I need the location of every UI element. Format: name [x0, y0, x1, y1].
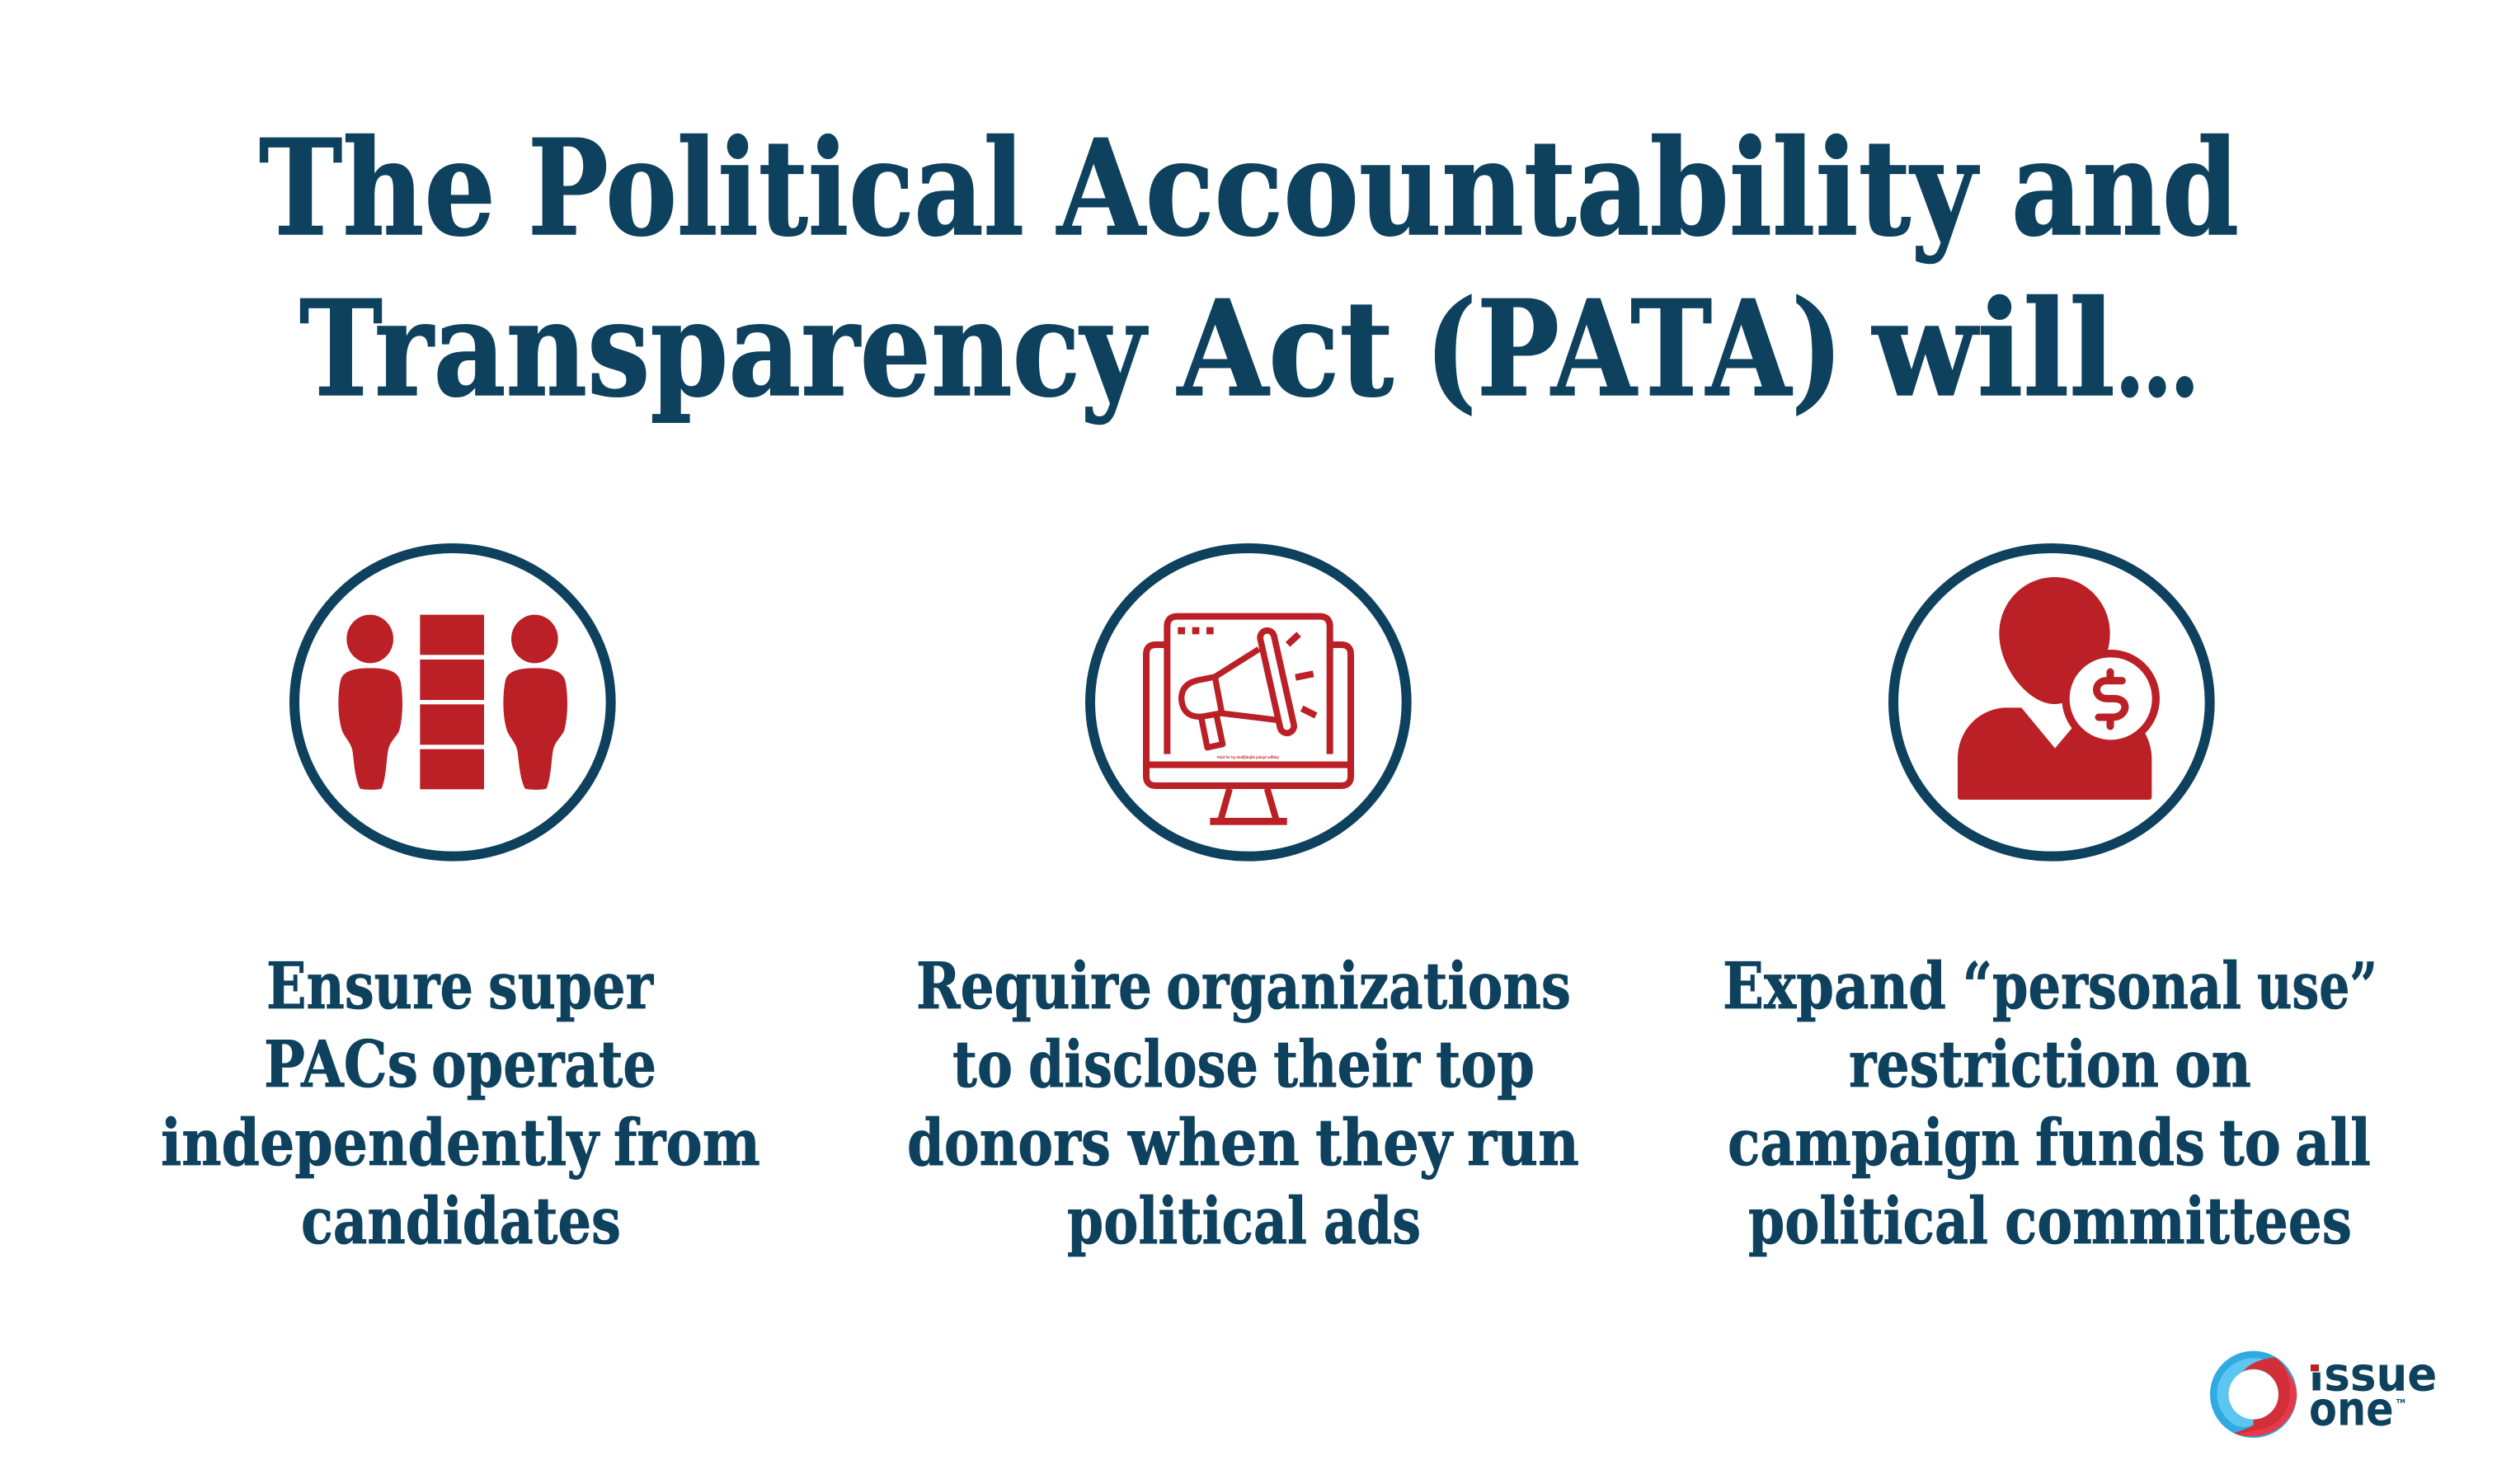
text block: donor disclosure: Require — [916, 949, 1152, 1024]
text block: super PACs: Ensure — [266, 949, 473, 1024]
panel: donor disclosure — [907, 548, 1579, 1259]
text block: personal use: political — [1748, 1184, 1988, 1259]
text block: personal use: “personal — [1963, 949, 2241, 1024]
icon: monitor with megaphone — [1090, 548, 1407, 857]
icon: logo ring — [2210, 1351, 2297, 1438]
panel: super PACs independence — [161, 548, 760, 1259]
title: ... — [2116, 303, 2198, 419]
text block: donor disclosure: when — [1127, 1106, 1300, 1181]
text block: donor disclosure: disclose — [1028, 1027, 1258, 1102]
title: Act — [1176, 271, 1394, 426]
title: (PATA) — [1425, 271, 1843, 426]
text block: personal use: on — [2175, 1027, 2251, 1102]
text block: personal use: committees — [2005, 1184, 2352, 1259]
title: Political — [528, 110, 1024, 265]
text block: personal use — [1723, 949, 2377, 1259]
text block: donor disclosure: top — [1436, 1027, 1535, 1102]
text block: personal use: use” — [2257, 949, 2377, 1024]
text block: donor disclosure: donors — [907, 1106, 1111, 1181]
text block: donor disclosure: ads — [1324, 1184, 1421, 1259]
text block: donor disclosure: their — [1273, 1027, 1421, 1102]
text block: super PACs: independently — [161, 1106, 600, 1181]
title: Accountability — [1056, 110, 1979, 265]
text block: super PACs — [161, 949, 760, 1259]
text block: donor disclosure: they — [1315, 1106, 1454, 1181]
text block: donor disclosure — [907, 949, 1579, 1259]
text block: personal use: campaign — [1728, 1106, 2020, 1181]
text block: personal use: all — [2295, 1106, 2371, 1181]
text block: personal use: funds — [2035, 1106, 2205, 1181]
title — [259, 110, 2239, 426]
text block: donor disclosure: run — [1467, 1106, 1579, 1181]
text block: donor disclosure: political — [1067, 1184, 1307, 1259]
wordmark: issue one: TM — [2396, 1398, 2405, 1405]
icon: two people separated by a wall — [294, 548, 611, 857]
text block: super PACs: PACs — [264, 1027, 418, 1102]
wordmark: issue one: one — [2309, 1382, 2394, 1436]
text block: super PACs: from — [614, 1106, 760, 1181]
title: will — [1871, 271, 2115, 426]
wordmark: issue one: issue — [2309, 1348, 2437, 1402]
icon: monitor with megaphone: Paid for by dsdfjldsjflx jsdsjd sdfldsj — [1217, 755, 1279, 759]
text block: personal use: to — [2219, 1106, 2281, 1181]
title: and — [2011, 110, 2239, 265]
text block: super PACs: operate — [431, 1027, 656, 1102]
panel: personal use restriction — [1723, 548, 2377, 1259]
title: The — [259, 110, 496, 265]
text block: donor disclosure: to — [952, 1027, 1013, 1102]
title: Transparency — [299, 271, 1148, 426]
text block: donor disclosure: organizations — [1166, 949, 1571, 1024]
text block: personal use: restriction — [1849, 1027, 2159, 1102]
wordmark: issue one — [2309, 1348, 2437, 1436]
text block: super PACs: candidates — [301, 1184, 621, 1259]
icon: person with dollar coin — [1893, 548, 2210, 857]
text block: super PACs: super — [488, 949, 654, 1024]
text block: personal use: Expand — [1723, 949, 1946, 1024]
logo: Issue One — [2210, 1348, 2437, 1438]
